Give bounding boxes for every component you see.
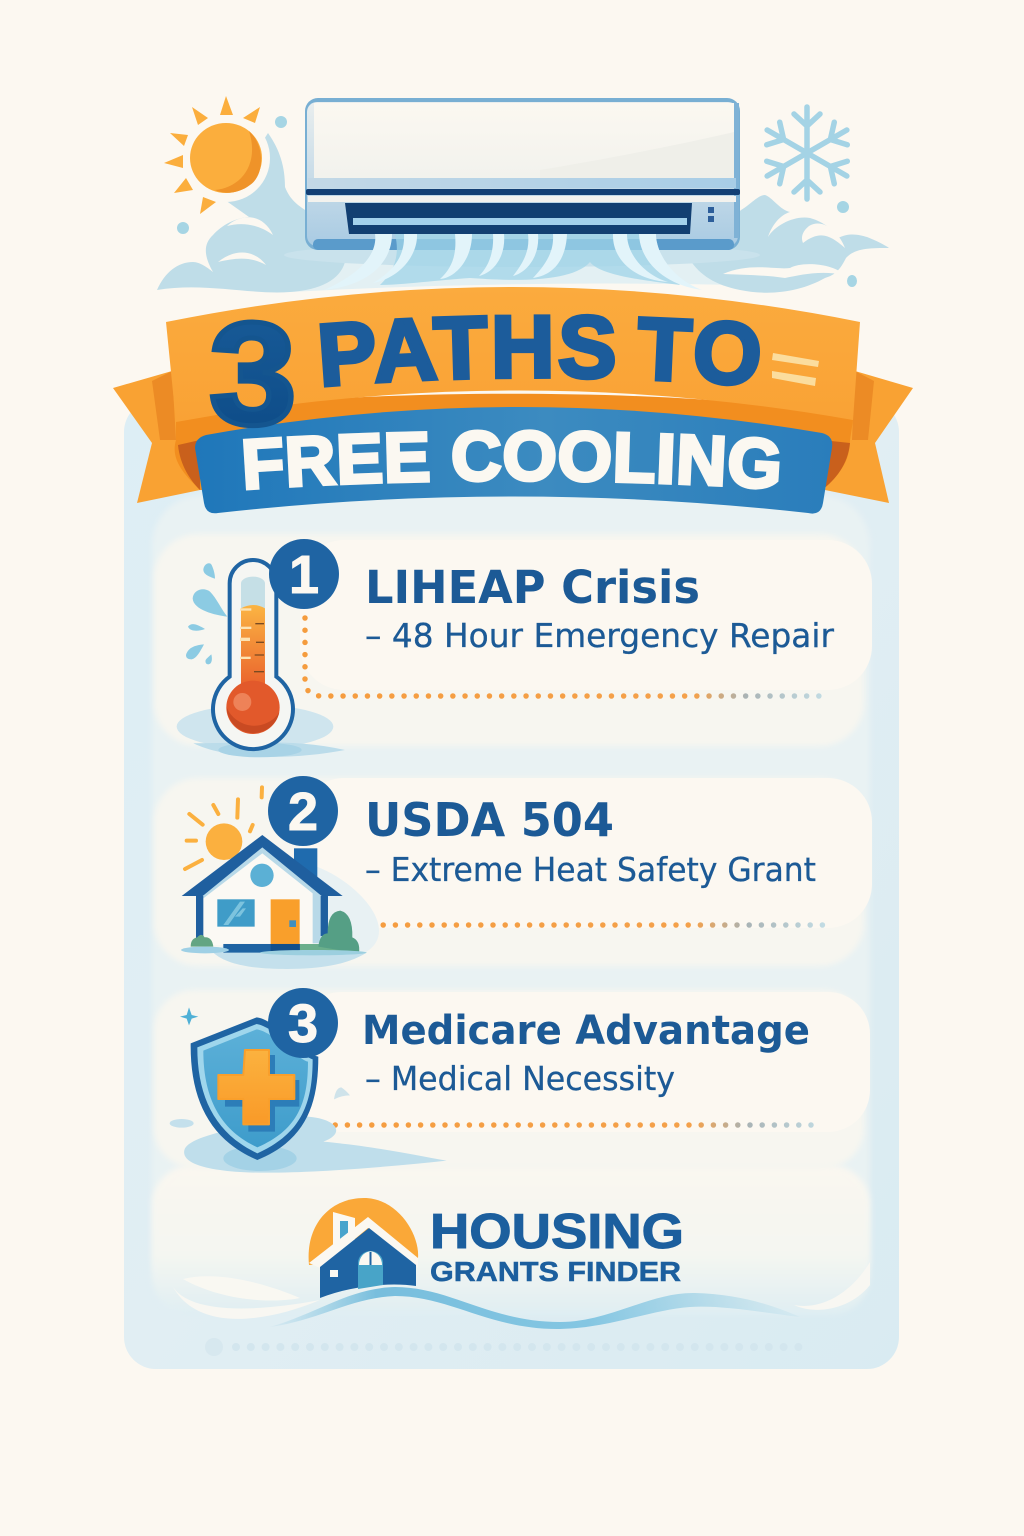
icon: house with sun [181, 787, 379, 969]
row 1 text card [300, 540, 872, 690]
clouds [157, 133, 889, 293]
blue banner [195, 407, 832, 514]
footer logo: Housing Grants Finder [172, 1198, 870, 1329]
row 2 text card [300, 778, 872, 928]
illustration: air conditioner hero [157, 96, 889, 293]
icon: sun [164, 96, 270, 214]
panel: main light blue card [124, 400, 899, 1369]
ribbon orange top band [166, 287, 860, 422]
faint dotted footer line [205, 1338, 806, 1356]
title line 2: FREE COOLING [242, 429, 780, 490]
decorative equals strokes [772, 353, 819, 386]
row 1 subtitle: – 48 Hour Emergency Repair [365, 616, 834, 655]
number badge 1 [269, 539, 339, 609]
vent [345, 203, 692, 234]
logo wordmark: GRANTS FINDER [430, 1256, 681, 1287]
row 3 dotted connector [323, 1122, 823, 1128]
indicator lights [708, 207, 714, 213]
number badge 2 [268, 776, 338, 846]
logo wordmark: HOUSING [430, 1205, 684, 1259]
logo wordmark [430, 1205, 684, 1287]
title banner: 3 Paths to Free Cooling [113, 287, 913, 514]
row 3 text card [300, 992, 870, 1132]
number badge 3: 3 [288, 994, 318, 1054]
icon: thermometer [177, 560, 345, 757]
row 3 subtitle: – Medical Necessity [365, 1059, 675, 1098]
AC unit body [305, 98, 740, 250]
panel: row 3 Medicare Advantage [154, 988, 870, 1173]
ribbon tails [113, 371, 913, 503]
droplets [177, 116, 857, 287]
icon: shield with cross [170, 1007, 447, 1173]
panel: row 2 USDA 504 [154, 776, 872, 969]
numeral 3: 3 [209, 292, 297, 456]
row 2 heading: USDA 504 [365, 793, 614, 847]
ribbon dark fold [175, 394, 853, 490]
number badge 3 [268, 988, 338, 1058]
row 1 dotted connector [305, 618, 820, 696]
row 2 background band [154, 778, 864, 966]
cloud highlights [218, 217, 845, 278]
row 1 heading: LIHEAP Crisis [365, 561, 700, 614]
logo icon: house and sun [309, 1198, 418, 1298]
cool air streams [324, 234, 702, 290]
panel: inner cream area [152, 495, 870, 1315]
number badge 1: 1 [289, 545, 319, 605]
row 1 background band [154, 534, 864, 746]
row 2 subtitle: – Extreme Heat Safety Grant [365, 850, 816, 889]
icon: snowflake [761, 107, 853, 199]
row 3 background band [154, 990, 864, 1168]
row 3 heading: Medicare Advantage [362, 1008, 810, 1054]
decorative footer waves [172, 1262, 870, 1329]
title line 1: PATHS TO [319, 314, 760, 388]
panel: row 1 LIHEAP Crisis [154, 534, 872, 757]
row 2 dotted connector [371, 922, 823, 928]
number badge 2: 2 [288, 782, 318, 842]
